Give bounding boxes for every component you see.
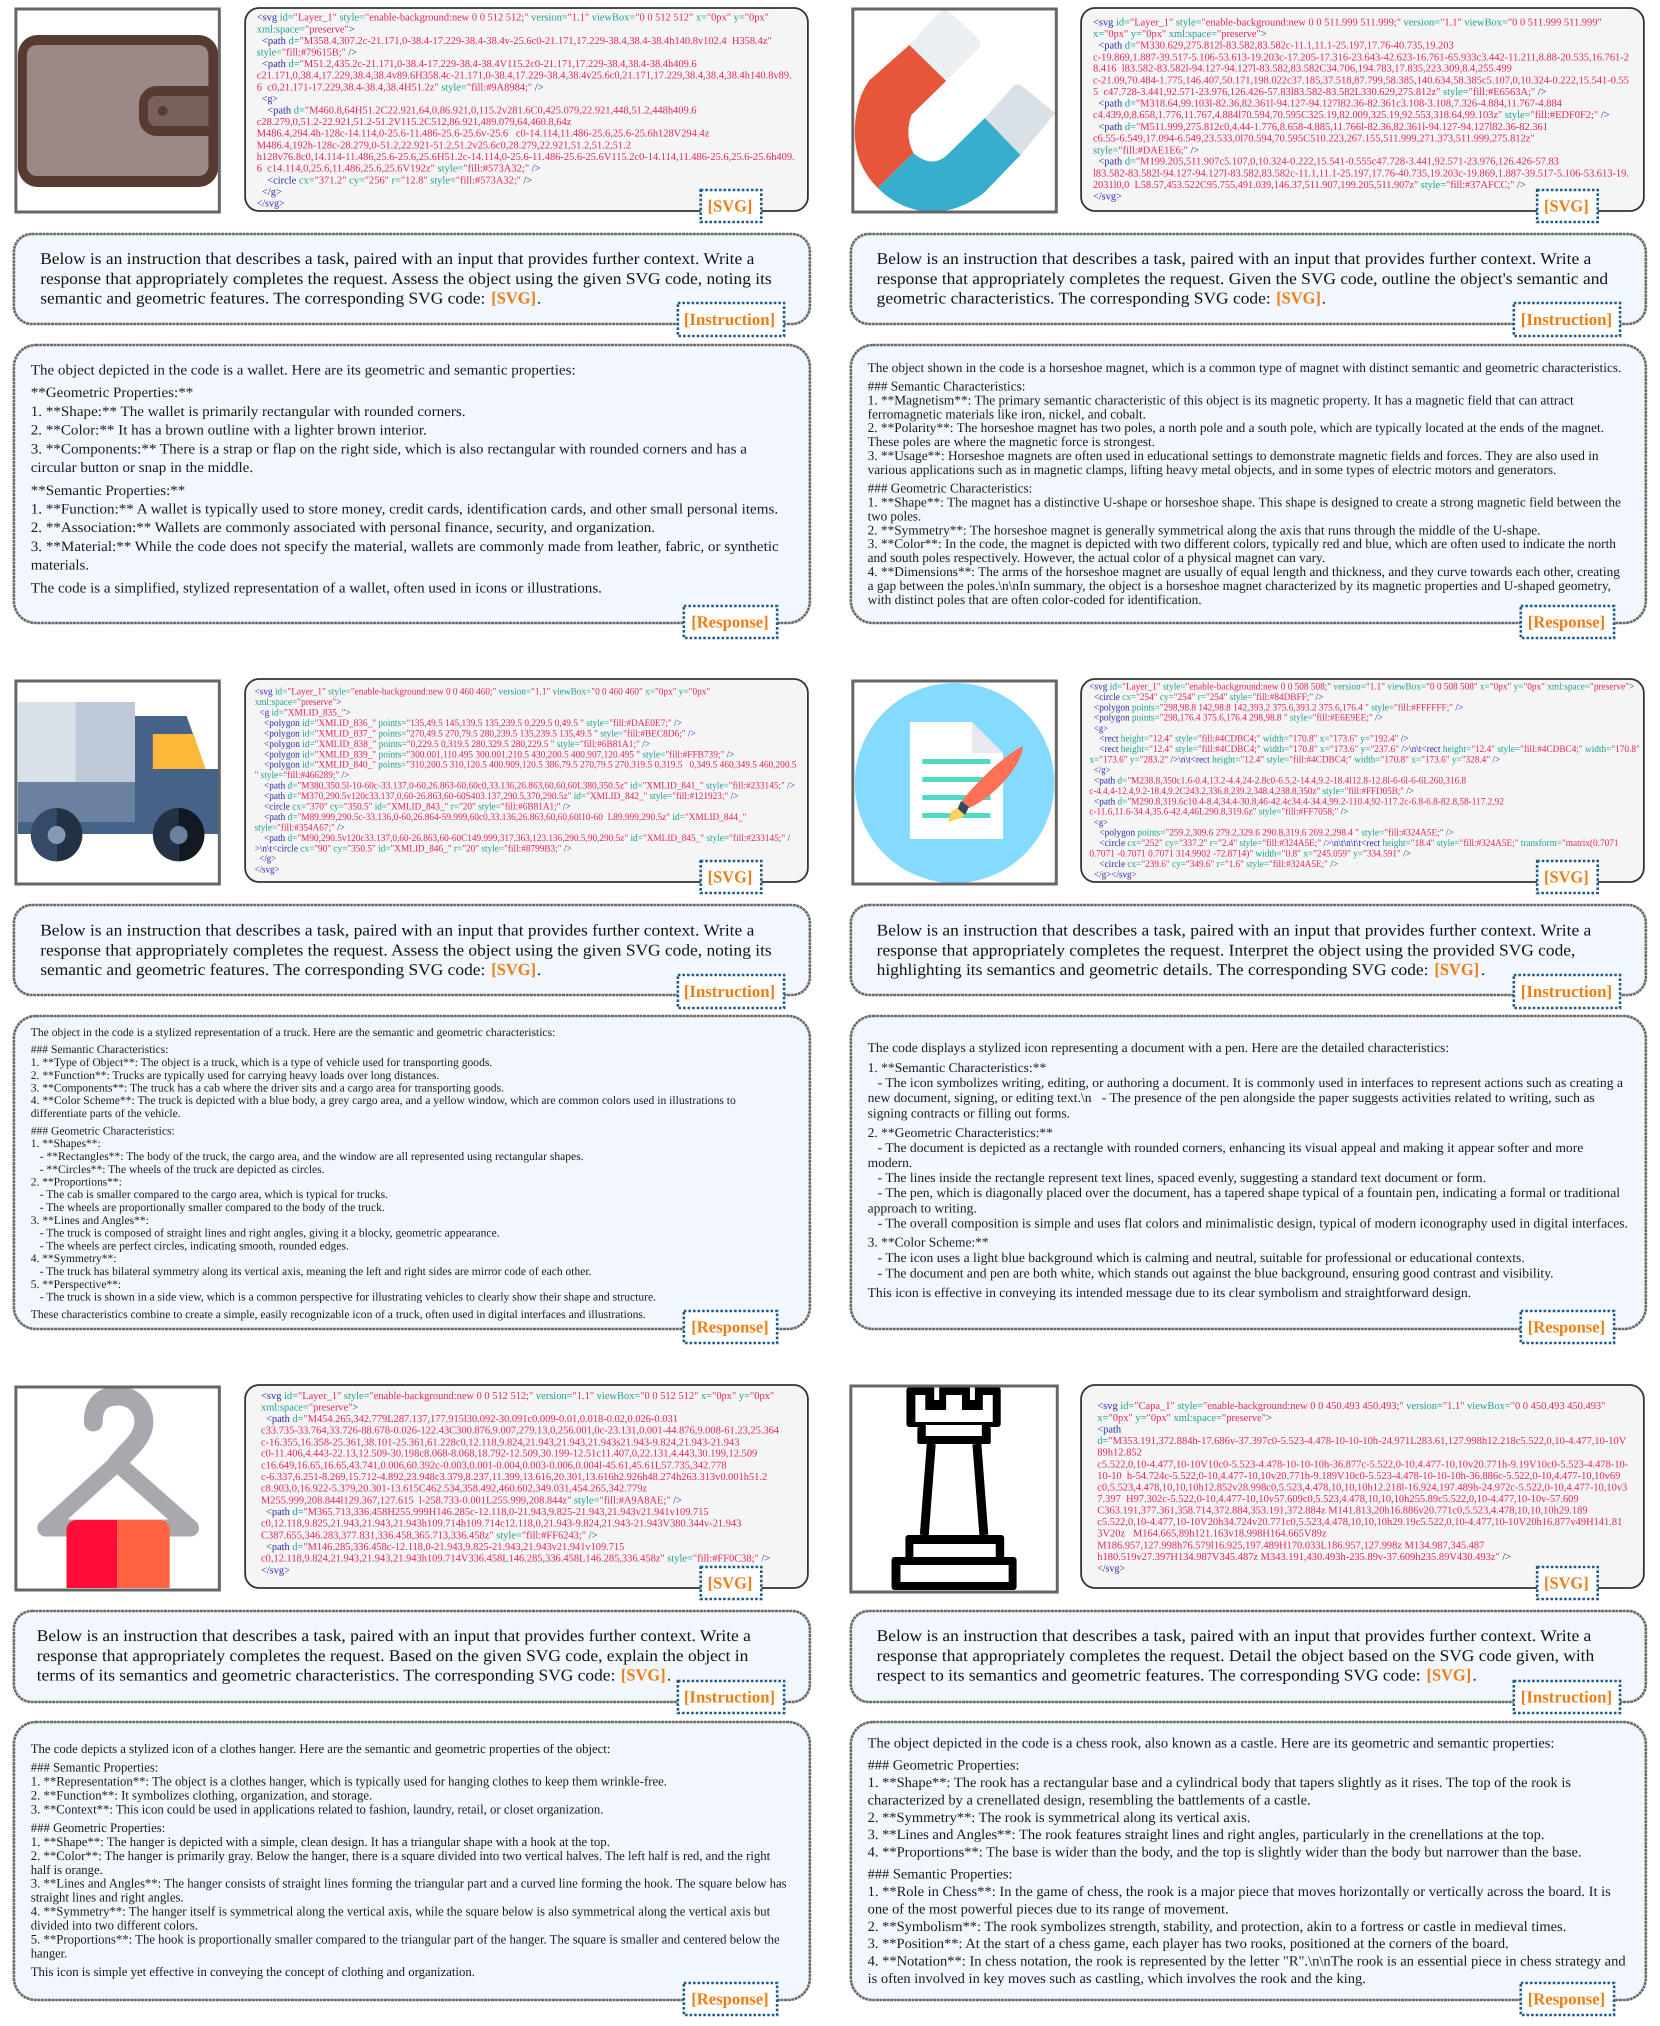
- panel: magnet response: various applications such as in magnetic clamps, lifting heavy metal objects, and in some types of electric motors and generators.: [868, 462, 1556, 477]
- panel: document response: - The document is depicted as a rectangle with rounded corners, enhancing its visual appeal and making it appear softer and more: [878, 1140, 1583, 1155]
- panel: rook response: The object depicted in the code is a chess rook, also known as a castle. Here are its geometric and semantic properties:: [868, 1736, 1554, 1752]
- panel: document response: signing contracts or filling out forms.: [868, 1105, 1070, 1120]
- panel: document example: [851, 679, 1646, 1343]
- panel: wallet SVG code: 6 c14.114,0,25.6,11.486,25.6,25.6V192z" style="fill:#573A32;" />: [257, 164, 541, 175]
- panel: hanger SVG code: c8.903,0,16.922-5.379,20.301-13.615C462.534,358.492,460.602,349.031,454.265,342.779z: [261, 1484, 647, 1495]
- panel: wallet SVG code: <circle cx="371.2" cy="256" r="12.8" style="fill:#573A32;" />: [267, 175, 532, 186]
- panel: wallet SVG code: </g>: [262, 187, 282, 198]
- panel: document SVG code: <circle cx="254" cy="254" r="254" style="fill:#84DBFF;" />: [1094, 692, 1324, 703]
- panel: truck instruction: semantic and geometric features. The corresponding SVG code:: [40, 960, 485, 979]
- panel: magnet response: a gap between the poles.\n\nIn summary, the object is a horseshoe magnet characterized by its magnetic properties and U-shaped geometry,: [868, 578, 1611, 593]
- panel: truck response: - The truck has bilateral symmetry along its vertical axis, meaning the left and right sides are mirror code of each other.: [40, 1265, 592, 1278]
- tag: Response: [1521, 606, 1614, 638]
- panel: document response: This icon is effective in conveying its intended message due to its clear symbolism and straightforward design.: [868, 1285, 1471, 1300]
- panel: hanger response: straight lines and right angles.: [31, 1890, 184, 1905]
- tag: Instruction: [Instruction]: [684, 982, 775, 1001]
- panel: magnet SVG code: <path d="M199.205,511.907c5.107,0,10.324-0.222,15.541-0.555c47.728-3.441,92.571-23.976,126.426-57.83: [1098, 157, 1559, 168]
- panel: rook response: 2. **Symmetry**: The rook is symmetrical along its vertical axis.: [868, 1810, 1250, 1826]
- panel: rook SVG code: C363.191,377.361,358.714,372.884,353.191,372.884z M141.813,20h16.886v20.771c0,5.523,4.478,10,10,10h29.189: [1097, 1505, 1588, 1516]
- panel: document SVG code: <g>: [1094, 817, 1108, 828]
- panel: rook instruction: Below is an instruction that describes a task, paired with an input that provides further context. Write a: [877, 1626, 1592, 1645]
- panel: rook response: characterized by a crenellated design, resembling the battlements of a castle.: [868, 1792, 1311, 1808]
- panel: rook SVG code: 7.397 H97.302c-5.522,0-10,4.477-10,10v57.609c0,5.523,4.478,10,10,10h255.89c5.522,0,10-4.477,10-10v-57.609: [1097, 1494, 1579, 1505]
- panel: rook response: one of the most powerful pieces due to its range of movement.: [868, 1902, 1229, 1918]
- tag: Instruction: [Instruction]: [1521, 982, 1612, 1001]
- panel: document response: - The icon symbolizes writing, editing, or authoring a document. It is commonly used in interfaces to represent actions such as creating a: [878, 1075, 1623, 1090]
- panel: document response: The code displays a stylized icon representing a document with a pen. Here are the detailed characteristics:: [868, 1040, 1449, 1055]
- panel: wallet response: circular button or snap in the middle.: [31, 460, 253, 476]
- panel: hanger response: [14, 1722, 810, 2015]
- panel: truck instruction: response that appropriately completes the request. Assess the object using the given SVG code, noting its: [40, 940, 772, 960]
- panel: hanger response: 3. **Lines and Angles**: The hanger consists of straight lines forming the triangular part and a curved line forming the hook. The square below has: [31, 1876, 787, 1891]
- panel: document response: [851, 1016, 1646, 1343]
- panel: wallet SVG code: style="fill:#79615B;" />: [257, 48, 357, 59]
- panel: wallet SVG code: <path d="M51.2,435.2c-21.171,0-38.4-17.229-38.4-38.4V115.2c0-21.171,17.229-38.4,38.4-38.4h409.6: [262, 59, 697, 70]
- tag: SVG: [SVG]: [1544, 1574, 1589, 1592]
- panel: wallet SVG code: h128v76.8c0,14.114-11.486,25.6-25.6,25.6H51.2c-14.114,0-25.6-11.486-25.6-25.6V115.2c0-14.114,11.486-25.6,25.6-25.6h409.: [257, 152, 795, 163]
- panel: document instruction: [SVG]: [1434, 960, 1479, 979]
- panel: rook SVG code: <path: [1097, 1425, 1122, 1436]
- panel: truck response: differentiate parts of the vehicle.: [31, 1107, 181, 1120]
- panel: hanger SVG code: </svg>: [261, 1565, 290, 1576]
- panel: magnet SVG code: style="fill:#DAE1E6;" />: [1093, 145, 1199, 156]
- panel: truck response: 1. **Type of Object**: The object is a truck, which is a type of vehicle used for transporting goods.: [31, 1056, 492, 1069]
- panel: rook SVG code: c0,5.523,4.478,10,10,10h12.852v28.998c0,5.523,4.478,10,10,10h12.218l-16.924,197.489h-24.972c-5.522,0-10,4.477-10,10v3: [1097, 1482, 1627, 1493]
- tag: Instruction: [Instruction]: [684, 310, 775, 329]
- panel: truck SVG code: >\n\t<circle cx="90" cy="350.5" id="XMLID_846_" r="20" style="fill:#8799B3;" />: [255, 843, 572, 854]
- panel: wallet response: **Semantic Properties:**: [31, 483, 185, 499]
- panel: wallet response: 2. **Association:** Wallets are commonly associated with personal finance, security, and organization.: [31, 520, 655, 536]
- panel: chess rook example: [851, 1385, 1646, 2015]
- panel: truck instruction: Below is an instruction that describes a task, paired with an input that provides further context. Write a: [40, 920, 755, 940]
- tag: SVG: [SVG]: [1544, 868, 1589, 886]
- tag: Response: [Response]: [691, 1990, 769, 2008]
- panel: magnet response: ferromagnetic materials like iron, nickel, and cobalt.: [868, 407, 1146, 422]
- tag: SVG: [SVG]: [708, 196, 752, 216]
- panel: document SVG code: <polygon points="298,176.4 375.6,176.4 298,98.8 " style="fill:#E6E9EE;" />: [1094, 713, 1383, 724]
- panel: document response: - The lines inside the rectangle represent text lines, spaced evenly, suggesting a standard text document or form.: [878, 1170, 1486, 1185]
- tag: SVG: [SVG]: [708, 1574, 752, 1592]
- panel: magnet example: [851, 8, 1646, 638]
- panel: rook response: 4. **Notation**: In chess notation, the rook is represented by the letter "R".\n\nThe rook is an essential piece in chess strategy and: [868, 1954, 1626, 1970]
- panel: truck SVG code: <path d="M90,290.5v120c33.137,0,60-26.863,60-60C149.999,317.363,123.136,290.5,90,290.5z" id="XMLID_845_" style="fill:#233145;" /: [264, 833, 790, 844]
- icon: clothes hanger: [16, 1387, 219, 1590]
- panel: magnet response: [851, 345, 1646, 638]
- panel: hanger response: half is orange.: [31, 1862, 103, 1877]
- panel: truck SVG code: <polygon id="XMLID_839_" points="300.001,110.495 300.001,210.5 430,200.5 400.907,120.495 " style="fill:#FFB739;" />: [264, 749, 735, 760]
- panel: truck response: - **Circles**: The wheels of the truck are depicted as circles.: [40, 1163, 325, 1176]
- panel: document SVG code: </g>: [1094, 765, 1111, 776]
- panel: document SVG code: </g></svg>: [1094, 869, 1137, 880]
- panel: rook response: ### Semantic Properties:: [868, 1866, 1013, 1882]
- panel: hanger response: 5. **Proportions**: The hook is proportionally smaller compared to the triangular part of the hanger. The square is smaller and centered below the: [31, 1932, 780, 1947]
- panel: hanger SVG code: c0-11.406,4.443-22.13,12.509-30.198c8.068-8.068,18.792-12.509,30.199-12.51c11.407,0,22.131,4.443,30.199,12.509: [261, 1449, 757, 1460]
- tag: Response: [684, 606, 777, 638]
- panel: magnet instruction: [851, 234, 1646, 336]
- panel: document instruction: [851, 905, 1646, 1008]
- panel: hanger SVG code: C387.655,346.283,377.831,336.458,365.713,336.458z" style="fill:#FF6243;" />: [261, 1530, 598, 1541]
- panel: magnet SVG code: l83.582-83.582l-94.127-94.127l-83.582,83.582c-11.1,11.1-25.197,17.76-40.735,19.203c-19.869,1.887-39.517-5.106-53.613-19.: [1093, 168, 1629, 179]
- panel: magnet SVG code: </svg>: [1093, 192, 1122, 203]
- panel: document SVG code: <rect height="12.4" style="fill:#4CDBC4;" width="170.8" x="173.6" y="237.6" />\n\t<rect height="12.4" style="fill:#4CDBC4;" width="170.8": [1099, 744, 1640, 755]
- tag: Response: [Response]: [691, 612, 769, 632]
- panel: document response: - The overall composition is simple and uses flat colors and minimalistic design, typical of modern iconography used in digital interfaces.: [878, 1216, 1628, 1231]
- panel: wallet SVG code: <path d="M358.4,307.2c-21.171,0-38.4-17.229-38.4-38.4v-25.6c0-21.171,17.229-38.4,38.4-38.4h140.8v102.4 H358.4z": [262, 36, 772, 47]
- panel: wallet instruction: Below is an instruction that describes a task, paired with an input that provides further context. Write a: [40, 249, 755, 268]
- panel: truck response: 3. **Lines and Angles**:: [31, 1214, 149, 1227]
- panel: hanger instruction: [SVG]: [621, 1666, 666, 1684]
- tag: Response: [1521, 1983, 1614, 2015]
- tag: Instruction: [Instruction]: [684, 1688, 775, 1706]
- panel: magnet SVG code: 5 c47.728-3.441,92.571-23.976,126.426-57.83l83.582-83.582L330.629,275.812z" style="fill:#E6563A;" />: [1093, 87, 1547, 98]
- panel: rook SVG code: x="0px" y="0px" xml:space="preserve">: [1097, 1413, 1272, 1424]
- panel: truck response: ### Geometric Characteristics:: [31, 1124, 175, 1138]
- panel: rook SVG code: [1081, 1385, 1644, 1599]
- panel: truck SVG code: <polygon id="XMLID_837_" points="270,49.5 270,79.5 280,239.5 135,239.5 135,49.5 " style="fill:#BEC8D6;" />: [264, 728, 696, 739]
- panel: wallet instruction: [SVG]: [491, 288, 536, 308]
- panel: magnet instruction: [SVG]: [1276, 288, 1321, 308]
- panel: truck response: - The wheels are perfect circles, indicating smooth, rounded edges.: [40, 1240, 349, 1252]
- panel: magnet SVG code: 8.416 l83.582-83.582l-94.127-94.127l-83.582,83.582C34.706,194.783,17.835,223.309,8.4,255.499: [1093, 64, 1512, 75]
- tag: Response: [684, 1311, 777, 1343]
- panel: hanger SVG code: <svg id="Layer_1" style="enable-background:new 0 0 512 512;" version="1.1" viewBox="0 0 512 512" x="0px" y="0px": [261, 1391, 774, 1402]
- panel: magnet response: 1. **Magnetism**: The primary semantic characteristic of this object is its magnetic property. It has a magnetic field that can attract: [868, 393, 1574, 408]
- panel: rook SVG code: 10-10 h-54.724c-5.522,0-10,4.477-10,10v20.771h-9.189V10c0-5.523-4.478-10-10-10h-36.886c-5.522,0-10,4.477-10,10v69: [1097, 1471, 1620, 1482]
- panel: wallet SVG code: c21.171,0,38.4,17.229,38.4,38.4v89.6H358.4c-21.171,0-38.4,17.229-38.4,38.4v25.6c0,21.171,17.229,38.4,38.4,38.4h140.8v89.: [257, 71, 792, 82]
- panel: hanger response: divided into two different colors.: [31, 1918, 198, 1933]
- panel: magnet response: 2. **Symmetry**: The horseshoe magnet is generally symmetrical along the axis that runs through the middle of the U-shape.: [868, 523, 1541, 538]
- panel: rook instruction: [851, 1611, 1646, 1713]
- panel: magnet response: two poles.: [868, 509, 921, 524]
- panel: magnet response: 3. **Color**: In the code, the magnet is depicted with two different colors, typically red and blue, which are often used to indicate the north: [868, 536, 1616, 551]
- panel: truck response: - The cab is smaller compared to the cargo area, which is typical for trucks.: [40, 1188, 388, 1201]
- icon: truck: [16, 681, 219, 884]
- panel: hanger response: 1. **Representation**: The object is a clothes hanger, which is typically used for hanging clothes to keep them wrinkle-free.: [31, 1774, 667, 1789]
- panel: document instruction: Below is an instruction that describes a task, paired with an input that provides further context. Write a: [877, 920, 1592, 940]
- panel: truck response: [14, 1016, 810, 1343]
- tag: SVG: [701, 1567, 761, 1599]
- tag: Instruction: [Instruction]: [1521, 310, 1612, 329]
- panel: magnet response: The object shown in the code is a horseshoe magnet, which is a common type of magnet with distinct semantic and geometric characteristics.: [868, 360, 1621, 375]
- panel: rook instruction: response that appropriately completes the request. Detail the object based on the SVG code given, with: [877, 1646, 1594, 1665]
- panel: document response: - The pen, which is diagonally placed over the document, has a tapered shape typical of a fountain pen, indicating a formal or traditional: [878, 1185, 1620, 1200]
- tag: Response: [Response]: [1528, 612, 1605, 632]
- panel: wallet response: The object depicted in the code is a wallet. Here are its geometric and semantic properties:: [31, 362, 576, 378]
- panel: truck response: ### Semantic Characteristics:: [31, 1043, 168, 1056]
- panel: magnet response: 2. **Polarity**: The horseshoe magnet has two poles, a north pole and a south pole, which are typically located at the ends of the magnet.: [868, 420, 1604, 435]
- panel: document SVG code: c-4.4,4-12.4,9.2-18.4,9.2C243.2,336.8,239.2,348.4,238.8,350z" style="fill:#FFD05B;" />: [1089, 786, 1414, 797]
- panel: hanger response: 2. **Function**: It symbolizes clothing, organization, and storage.: [31, 1788, 372, 1803]
- panel: hanger SVG code: c33.735-33.764,33.726-88.678-0.026-122.43C300.876,9.007,279.13,0,256.001,0c-23.131,0.001-44.876,9.008-61.23,25.364: [261, 1426, 780, 1437]
- panel: hanger SVG code: c-16.355,16.358-25.361,38.101-25.361,61.228c0,12.118,9.824,21.943,21.943,21.943s21.943-9.824,21.943-21.943: [261, 1437, 739, 1448]
- panel: document SVG code: <polygon points="298,98.8 142,98.8 142,393.2 375.6,393.2 375.6,176.4 " style="fill:#FFFFFF;" />: [1094, 702, 1464, 713]
- panel: document SVG code: <circle cx="239.6" cy="349.6" r="1.6" style="fill:#324A5E;" />: [1099, 859, 1338, 870]
- panel: magnet instruction: .: [1322, 288, 1326, 308]
- panel: truck response: 2. **Proportions**:: [31, 1176, 122, 1188]
- panel: magnet SVG code: c-21.09,70.484-1.775,146.407,50.171,198.022c37.185,37.518,87.799,58.385,140.634,58.385c5.107,0,10.324-0.222,15.541-0.55: [1093, 75, 1629, 86]
- panel: magnet SVG code: <path d="M318.64,99.103l-82.36,82.361l-94.127-94.127l82.36-82.361c3.108-3.108,7.326-4.884,11.767-4.884: [1098, 99, 1563, 110]
- panel: truck instruction: [SVG]: [491, 960, 536, 979]
- tag: Instruction: [678, 1681, 784, 1713]
- tag: SVG: [701, 190, 761, 222]
- panel: wallet response: **Geometric Properties:**: [31, 385, 193, 401]
- tag: SVG: [1537, 1567, 1598, 1599]
- tag: SVG: [SVG]: [708, 868, 752, 886]
- panel: document SVG code: <rect height="12.4" style="fill:#4CDBC4;" width="170.8" x="173.6" y="192.4" />: [1099, 734, 1409, 745]
- tag: SVG: [SVG]: [1544, 196, 1589, 216]
- panel: truck example: [14, 679, 810, 1343]
- panel: rook instruction: [SVG]: [1426, 1666, 1471, 1684]
- panel: hanger response: ### Geometric Properties:: [31, 1820, 165, 1835]
- panel: rook response: 3. **Position**: At the start of a chess game, each player has two rooks, positioned at the corners of the board.: [868, 1936, 1509, 1952]
- tag: Instruction: [678, 975, 784, 1008]
- panel: rook response: is often involved in key moves such as castling, which involves the rook and the king.: [868, 1971, 1366, 1987]
- icon: document with pen: [853, 681, 1056, 884]
- panel: wallet response: 3. **Material:** While the code does not specify the material, wallets are commonly made from leather, fabric, or synthetic: [31, 539, 779, 555]
- panel: magnet SVG code: c6.55-6.549,17.094-6.549,23.533,0l70.594,70.595C510.223,267.155,511.999,271.373,511.999,275.812z": [1093, 134, 1535, 145]
- panel: hanger response: 1. **Shape**: The hanger is depicted with a simple, clean design. It has a triangular shape with a hook at the top.: [31, 1834, 610, 1849]
- panel: hanger instruction: [14, 1611, 810, 1713]
- icon: horseshoe magnet: [853, 9, 1056, 212]
- icon: wallet: [16, 9, 219, 212]
- panel: truck SVG code: " style="fill:#466289;" />: [255, 770, 350, 781]
- panel: truck SVG code: xml:space="preserve">: [255, 697, 342, 708]
- panel: document response: new document, signing, or editing text.\n - The presence of the pen alongside the paper suggests activities related to writing, such as: [868, 1090, 1595, 1105]
- panel: document response: 1. **Semantic Characteristics:**: [868, 1060, 1047, 1075]
- panel: wallet SVG code: c28.279,0,51.2-22.921,51.2-51.2V115.2C512,86.921,489.079,64,460.8,64z: [257, 117, 572, 128]
- panel: wallet SVG code: M486.4,294.4h-128c-14.114,0-25.6-11.486-25.6-25.6v-25.6 c0-14.114,11.486-25.6,25.6-25.6h128V294.4z: [257, 129, 710, 140]
- panel: wallet response: 3. **Components:** There is a strap or flap on the right side, which is also rectangular with rounded corners and has a: [31, 442, 748, 458]
- panel: magnet response: with distinct poles that are often color-coded for identification.: [868, 592, 1202, 607]
- panel: document response: - The document and pen are both white, which stands out against the blue background, ensuring good contrast and visibility.: [878, 1266, 1554, 1281]
- panel: wallet instruction: .: [537, 288, 541, 308]
- panel: rook SVG code: c5.522,0,10-4.477,10-10V10c0-5.523-4.478-10-10-10h-36.877c-5.522,0-10,4.477-10,10v20.771h-9.19V10c0-5.523-4.478-10-: [1097, 1459, 1629, 1470]
- icon: chess rook: [851, 1386, 1057, 1592]
- panel: wallet response: materials.: [31, 558, 89, 574]
- panel: magnet instruction: Below is an instruction that describes a task, paired with an input that provides further context. Write a: [877, 249, 1592, 268]
- panel: rook SVG code: d="M353.191,372.884h-17.686v-37.397c0-5.523-4.478-10-10-10h-24.971L283.61,127.998h12.218c5.522,0,10-4.477,10-10V: [1097, 1436, 1627, 1447]
- panel: hanger example: [14, 1385, 810, 2015]
- panel: truck response: 1. **Shapes**:: [31, 1137, 101, 1150]
- panel: rook response: 3. **Lines and Angles**: The rook features straight lines and right angles, particularly in the crenellations at the top.: [868, 1827, 1545, 1843]
- panel: rook SVG code: <svg id="Capa_1" style="enable-background:new 0 0 450.493 450.493;" version="1.1" viewBox="0 0 450.493 450.493": [1097, 1401, 1605, 1412]
- panel: truck response: 2. **Function**: Trucks are typically used for carrying heavy loads over long distances.: [31, 1069, 439, 1082]
- panel: hanger SVG code: c0,12.118,9.824,21.943,21.943,21.943h109.714V336.458L146.285,336.458L146.285,336.458z" style="fill:#FF0C38;" />: [261, 1554, 770, 1565]
- panel: hanger instruction: .: [667, 1666, 671, 1684]
- panel: truck SVG code: style="fill:#354A67;" />: [255, 822, 345, 833]
- panel: wallet response: 1. **Shape:** The wallet is primarily rectangular with rounded corners.: [31, 404, 465, 420]
- panel: document SVG code: <svg id="Layer_1" style="enable-background:new 0 0 508 508;" version="1.1" viewBox="0 0 508 508" x="0px" y="0px" xml:space="preserve">: [1089, 682, 1635, 693]
- panel: truck SVG code: <path d="M380,350.5l-10-60c-33.137,0-60,26.863-60,60c0,33.136,26.863,60,60,60L380,350.5z" id="XMLID_841_" style="fill:#233145;" />: [264, 780, 795, 791]
- tag: Response: [Response]: [691, 1318, 769, 1336]
- panel: wallet example: [14, 8, 810, 638]
- panel: rook SVG code: h180.519v27.397H134.987V345.487z M343.191,430.493h-235.89v-37.609h235.89V430.493z" />: [1097, 1552, 1511, 1563]
- panel: document SVG code: c-11.6,11.6-34.4,35.6-42.4,46L290.8,319.6z" style="fill:#FF7058;" />: [1089, 807, 1349, 818]
- tag: Instruction: [1514, 975, 1620, 1008]
- panel: rook SVG code: 89h12.852: [1097, 1448, 1142, 1459]
- panel: truck SVG code: [245, 679, 808, 893]
- panel: document instruction: response that appropriately completes the request. Interpret the object using the provided SVG code,: [877, 940, 1575, 960]
- panel: rook response: [851, 1722, 1646, 2015]
- tag: Response: [Response]: [1528, 1318, 1605, 1336]
- panel: wallet SVG code: <path d="M460.8,64H51.2C22.921,64,0,86.921,0,115.2v281.6C0,425.079,22.921,448,51.2,448h409.6: [267, 106, 697, 117]
- panel: rook response: 2. **Symbolism**: The rook symbolizes strength, stability, and protection, akin to a fortress or castle in medieval times.: [868, 1919, 1566, 1935]
- panel: wallet SVG code: [245, 8, 808, 222]
- panel: document SVG code: <polygon points="259.2,309.6 279.2,329.6 290.8,319.6 269.2,298.4 " style="fill:#324A5E;" />: [1099, 828, 1454, 839]
- panel: rook SVG code: 3V20z M164.665,89h121.163v18.998H164.665V89z: [1097, 1529, 1327, 1540]
- panel: hanger response: This icon is simple yet effective in conveying the concept of clothing and organization.: [31, 1964, 475, 1979]
- panel: document response: modern.: [868, 1155, 912, 1170]
- panel: hanger SVG code: c16.649,16.65,16.65,43.741,0.006,60.392c-0.003,0.001-0.004,0.003-0.006,0.004l-45.61,45.61L57.735,342.778: [261, 1460, 727, 1471]
- panel: hanger SVG code: M255.999,208.844l129.367,127.615 l-258.733-0.001L255.999,208.844z" style="fill:#A9A8AE;" />: [261, 1495, 682, 1506]
- panel: truck response: - **Rectangles**: The body of the truck, the cargo area, and the window are all represented using rectangular shapes.: [40, 1150, 584, 1163]
- panel: document SVG code: <g>: [1094, 723, 1108, 734]
- panel: truck response: - The wheels are proportionally smaller compared to the body of the truck.: [40, 1201, 385, 1214]
- panel: document response: - The icon uses a light blue background which is calming and neutral, suitable for professional or educational contexts.: [878, 1250, 1525, 1265]
- panel: hanger SVG code: <path d="M146.285,336.458c-12.118,0-21.943,9.825-21.943,21.943v21.941v109.715: [266, 1542, 624, 1553]
- panel: hanger response: 3. **Context**: This icon could be used in applications related to fashion, laundry, retail, or closet organization.: [31, 1802, 603, 1817]
- panel: magnet instruction: geometric characteristics. The corresponding SVG code:: [877, 288, 1271, 308]
- tag: Response: [Response]: [1528, 1990, 1605, 2008]
- panel: truck response: 3. **Components**: The truck has a cab where the driver sits and a cargo area for transporting goods.: [31, 1082, 504, 1094]
- panel: rook instruction: respect to its semantics and geometric features. The corresponding SVG code:: [877, 1666, 1421, 1684]
- panel: hanger SVG code: <path d="M454.265,342.779L287.137,177.915l30.092-30.091c0.009-0.01,0.018-0.02,0.026-0.031: [266, 1414, 678, 1425]
- panel: hanger response: ### Semantic Properties:: [31, 1760, 158, 1775]
- panel: truck response: 4. **Symmetry**:: [31, 1252, 117, 1265]
- panel: truck SVG code: <path d="M370,290.5v120c33.137,0,60-26.863,60-60S403.137,290.5,370,290.5z" id="XMLID_842_" style="fill:#121923;" />: [264, 791, 739, 802]
- tag: Instruction: [678, 303, 784, 336]
- panel: truck SVG code: <path d="M89.999,290.5c-33.136,0-60,26.864-59.999,60c0,33.136,26.863,60,60,60l10-60 L89.999,290.5z" id="XMLID_844_": [264, 812, 746, 823]
- tag: Response: [684, 1983, 777, 2015]
- panel: rook SVG code: c5.522,0,10-4.477,10-10V20h34.724v20.771c0,5.523,4.478,10,10,10h29.19c5.522,0,10-4.477,10-10V20h16.877v49H141.81: [1097, 1517, 1622, 1528]
- panel: truck SVG code: <polygon id="XMLID_840_" points="310,200.5 310,120.5 400.909,120.5 386,79.5 270,79.5 270,319.5 0,319.5 0,349.5 460,349.5 460,200.5: [264, 760, 796, 771]
- tag: SVG: [1537, 190, 1598, 222]
- panel: truck response: The object in the code is a stylized representation of a truck. Here are the semantic and geometric characteristics:: [31, 1026, 555, 1039]
- panel: rook response: 4. **Proportions**: The base is wider than the body, and the top is slightly wider than the body but narrower than the base.: [868, 1844, 1582, 1860]
- panel: document SVG code: x="173.6" y="283.2" />\n\t<rect height="12.4" style="fill:#4CDBC4;" width="170.8" x="173.6" y="328.4" />: [1089, 755, 1501, 766]
- panel: hanger response: hanger.: [31, 1946, 67, 1961]
- panel: magnet instruction: response that appropriately completes the request. Given the SVG code, outline the object's semantic and: [877, 269, 1608, 288]
- panel: hanger response: The code depicts a stylized icon of a clothes hanger. Here are the semantic and geometric properties of the object:: [31, 1741, 610, 1756]
- panel: truck SVG code: </svg>: [255, 864, 280, 875]
- panel: rook response: 1. **Shape**: The rook has a rectangular base and a cylindrical body that tapers slightly as it rises. The top of the rook is: [868, 1775, 1572, 1791]
- panel: truck SVG code: <circle cx="370" cy="350.5" id="XMLID_843_" r="20" style="fill:#6B81A1;" />: [264, 801, 571, 812]
- panel: hanger SVG code: [245, 1385, 808, 1599]
- panel: truck response: - The truck is shown in a side view, which is a common perspective for illustrating vehicles to clearly show their shape and structure.: [40, 1290, 656, 1304]
- panel: document SVG code: <circle cx="252" cy="337.2" r="2.4" style="fill:#324A5E;" />\n\t\n\t\t<rect height="18.4" style="fill:#324A5E;" transform="matrix(0.7071: [1099, 838, 1618, 849]
- tag: SVG: [1537, 861, 1598, 893]
- panel: rook SVG code: M186.957,127.998h76.579l16.925,197.489H170.033L186.957,127.998z M134.987,345.487: [1097, 1540, 1484, 1551]
- panel: magnet response: ### Geometric Characteristics:: [868, 480, 1032, 495]
- panel: document instruction: highlighting its semantics and geometric details. The corresponding SVG code:: [877, 960, 1428, 979]
- panel: truck response: 4. **Color Scheme**: The truck is depicted with a blue body, a grey cargo area, and a yellow window, which are common colors used in illustrations to: [31, 1094, 736, 1107]
- panel: truck response: 5. **Perspective**:: [31, 1278, 121, 1291]
- panel: wallet SVG code: <svg id="Layer_1" style="enable-background:new 0 0 512 512;" version="1.1" viewBox="0 0 512 512" x="0px" y="0px": [257, 13, 769, 24]
- panel: document SVG code: [1081, 679, 1644, 893]
- panel: wallet SVG code: M486.4,192h-128c-28.279,0-51.2,22.921-51.2,51.2v25.6c0,28.279,22.921,51.2,51.2,51.2: [257, 140, 631, 151]
- tag: SVG: [701, 861, 761, 893]
- panel: magnet SVG code: <path d="M511.999,275.812c0,4.44-1.776,8.658-4.885,11.766l-82.36,82.361l-94.127-94.127l82.36-82.361: [1098, 122, 1548, 133]
- panel: hanger instruction: response that appropriately completes the request. Based on the given SVG code, explain the object in: [37, 1646, 748, 1665]
- panel: wallet response: 1. **Function:** A wallet is typically used to store money, credit cards, identification cards, and other small personal items.: [31, 502, 778, 518]
- panel: truck SVG code: <polygon id="XMLID_836_" points="135,49.5 145,139.5 135,239.5 0,229.5 0,49.5 " style="fill:#DAE0E7;" />: [264, 718, 682, 729]
- panel: wallet instruction: [14, 234, 810, 336]
- panel: wallet instruction: response that appropriately completes the request. Assess the object using the given SVG code, noting its: [40, 269, 772, 288]
- panel: wallet response: The code is a simplified, stylized representation of a wallet, often used in icons or illustrations.: [31, 580, 602, 596]
- panel: rook instruction: .: [1473, 1666, 1477, 1684]
- panel: truck SVG code: <g id="XMLID_835_">: [259, 707, 351, 718]
- panel: magnet SVG code: c4.439,0,8.658,1.776,11.767,4.884l70.594,70.595C325.19,82.009,325.19,92.553,318.64,99.103z" style="fill:#EDF0F2;" />: [1093, 110, 1610, 121]
- panel: document response: 2. **Geometric Characteristics:**: [868, 1125, 1053, 1140]
- panel: truck response: These characteristics combine to create a simple, easily recognizable icon of a truck, often used in digital interfaces and illustrations.: [31, 1308, 646, 1321]
- panel: magnet response: 3. **Usage**: Horseshoe magnets are often used in educational settings to demonstrate magnetic fields and forces. They are also used in: [868, 448, 1599, 463]
- panel: hanger SVG code: c0,12.118,9.825,21.943,21.943,21.943h109.714h109.714c12.118,0,21.943-9.824,21.943-21.943V380.344v-21.943: [261, 1519, 741, 1530]
- panel: hanger response: 2. **Color**: The hanger is primarily gray. Below the hanger, there is a square divided into two vertical halves. The left half is red, and the right: [31, 1848, 771, 1863]
- tag: Instruction: [1514, 1681, 1620, 1713]
- panel: hanger SVG code: xml:space="preserve">: [261, 1403, 358, 1414]
- panel: wallet SVG code: xml:space="preserve">: [257, 25, 355, 36]
- panel: hanger SVG code: c-6.337,6.251-8.269,15.712-4.892,23.948c3.379,8.237,11.399,13.616,20.301,13.616h2.926h48.274h263.313v0.001h51.2: [261, 1472, 767, 1483]
- panel: document instruction: .: [1481, 960, 1485, 979]
- panel: truck instruction: [14, 905, 810, 1008]
- panel: wallet SVG code: <g>: [262, 94, 278, 105]
- panel: truck SVG code: </g>: [259, 854, 277, 865]
- panel: wallet SVG code: 6 c0,21.171-17.229,38.4-38.4,38.4H51.2z" style="fill:#9A8984;" />: [257, 82, 544, 93]
- panel: magnet SVG code: [1081, 8, 1644, 222]
- panel: wallet response: 2. **Color:** It has a brown outline with a lighter brown interior.: [31, 422, 427, 438]
- panel: wallet instruction: semantic and geometric features. The corresponding SVG code:: [40, 288, 485, 308]
- panel: document SVG code: <path d="M238.8,350c1.6-0.4,13.2-4.4,24-2.8c0-6.5,2-14.4,9.2-18.4l12.8-12.8l-6-6l-6-6L260,316.8: [1094, 775, 1466, 786]
- panel: rook SVG code: </svg>: [1097, 1564, 1125, 1575]
- panel: truck SVG code: <svg id="Layer_1" style="enable-background:new 0 0 460 460;" version="1.1" viewBox="0 0 460 460" x="0px" y="0px": [255, 686, 710, 697]
- panel: wallet SVG code: </svg>: [257, 199, 285, 210]
- panel: hanger response: 4. **Symmetry**: The hanger itself is symmetrical along the vertical axis, while the square below is also symmetrical along the vertical axis but: [31, 1904, 771, 1919]
- tag: Response: [1521, 1311, 1614, 1343]
- panel: hanger instruction: Below is an instruction that describes a task, paired with an input that provides further context. Write a: [37, 1626, 752, 1645]
- panel: hanger instruction: terms of its semantics and geometric characteristics. The corresponding SVG code:: [37, 1666, 615, 1684]
- panel: wallet response: [14, 345, 810, 638]
- tag: Instruction: [Instruction]: [1521, 1688, 1612, 1706]
- panel: truck response: - The truck is composed of straight lines and right angles, giving it a blocky, geometric appearance.: [40, 1226, 500, 1240]
- panel: document response: approach to writing.: [868, 1201, 977, 1216]
- panel: magnet response: 1. **Shape**: The magnet has a distinctive U-shape or horseshoe shape. This shape is designed to create a strong magnetic field between the: [868, 494, 1621, 509]
- tag: Instruction: [1514, 303, 1620, 336]
- panel: magnet SVG code: x="0px" y="0px" xml:space="preserve">: [1093, 29, 1267, 40]
- panel: truck SVG code: <polygon id="XMLID_838_" points="0,229.5 0,319.5 280,329.5 280,229.5 " style="fill:#6B81A1;" />: [264, 739, 650, 750]
- panel: rook response: ### Geometric Properties:: [868, 1758, 1019, 1774]
- panel: truck instruction: .: [537, 960, 541, 979]
- panel: magnet response: ### Semantic Characteristics:: [868, 379, 1025, 394]
- panel: magnet SVG code: <path d="M330.629,275.812l-83.582,83.582c-11.1,11.1-25.197,17.76-40.735,19.203: [1098, 41, 1454, 52]
- panel: magnet SVG code: c-19.869,1.887-39.517-5.106-53.613-19.203c-17.205-17.316-23.643-42.623-16.761-65.933c3.442-11.211,8.88-20.535,16.761-2: [1093, 52, 1629, 63]
- panel: document response: 3. **Color Scheme:**: [868, 1235, 989, 1250]
- panel: magnet SVG code: <svg id="Layer_1" style="enable-background:new 0 0 511.999 511.999;" version="1.1" viewBox="0 0 511.999 511.999": [1093, 18, 1602, 29]
- panel: magnet response: These poles are where the magnetic force is strongest.: [868, 434, 1155, 449]
- panel: hanger SVG code: <path d="M365.713,336.458H255.999H146.285c-12.118,0-21.943,9.825-21.943,21.943v21.941v109.715: [266, 1507, 709, 1518]
- panel: magnet SVG code: 2031l0,0 L58.57,453.522C95.755,491.039,146.37,511.907,199.205,511.907z" style="fill:#37AFCC;" />: [1093, 180, 1526, 191]
- panel: magnet response: and south poles respectively. However, the actual color of a physical magnet can vary.: [868, 550, 1325, 565]
- panel: rook response: 1. **Role in Chess**: In the game of chess, the rook is a major piece that moves horizontally or vertically across the board. It is: [868, 1884, 1611, 1900]
- panel: document SVG code: 0.7071 -0.7071 0.7071 314.9902 -72.8714)" width="0.8" x="245.059" y="334.591" />: [1089, 848, 1411, 859]
- panel: document SVG code: <path d="M290.8,319.6c10.4-8.4,34.4-30.8,46-42.4c34.4-34.4,99.2-110.4,92-117.2c-6.8-6.8-82.8,58-117.2,92: [1094, 796, 1504, 807]
- panel: magnet response: 4. **Dimensions**: The arms of the horseshoe magnet are usually of equal length and thickness, and they curve towards each other, creating: [868, 564, 1620, 579]
